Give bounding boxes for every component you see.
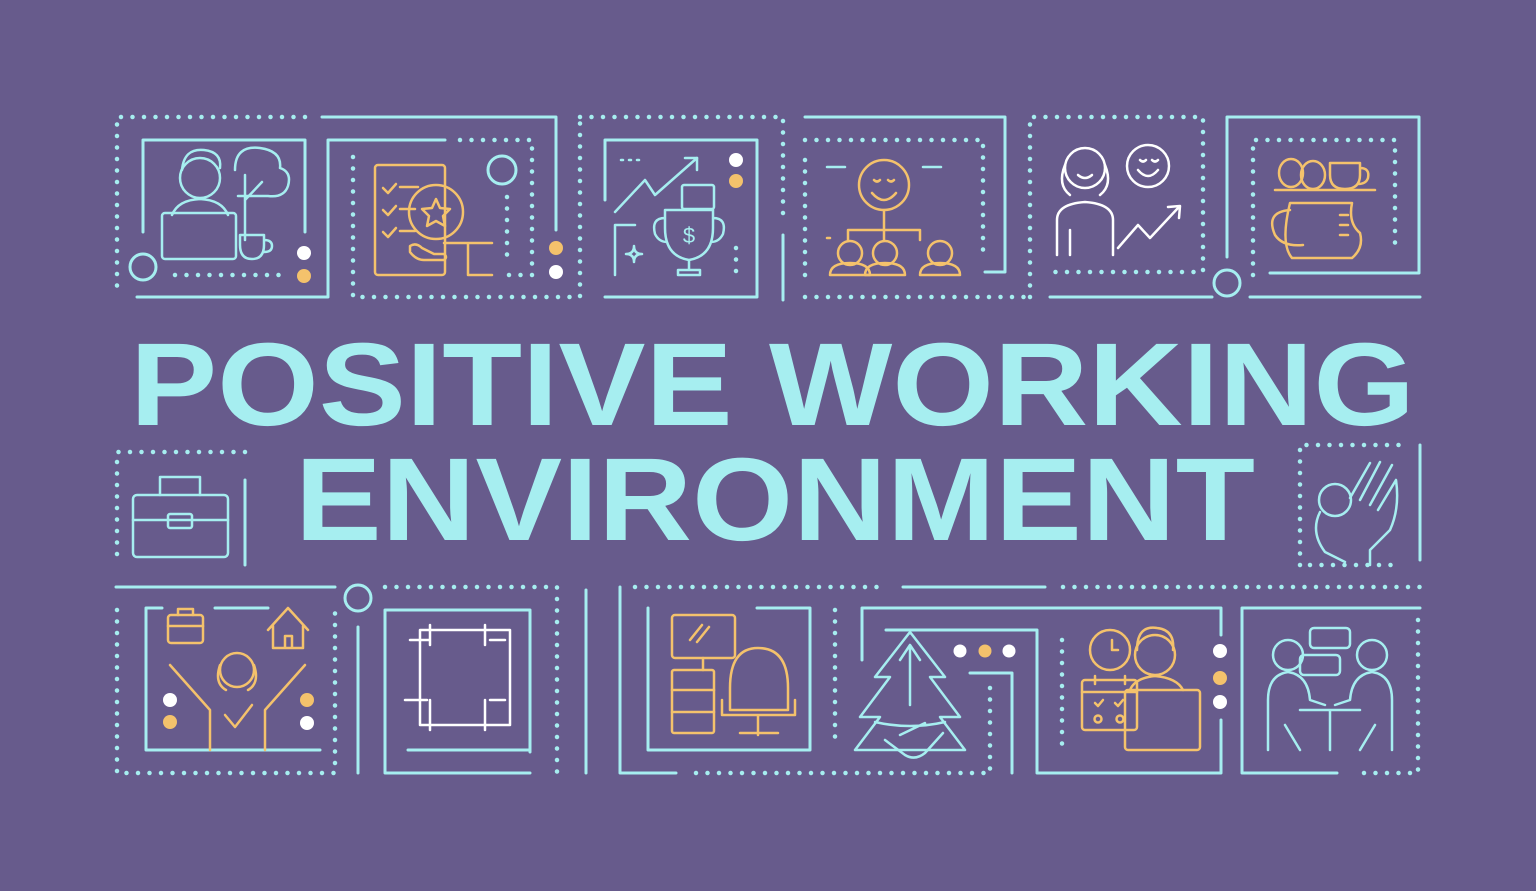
panel: middle side frames (117, 445, 1420, 565)
icon: clipboard with star (375, 165, 492, 275)
icon: OK hand gesture (1316, 462, 1397, 565)
icon: man with laptop and plant (162, 148, 289, 259)
icon: man with calendar and clock (1082, 628, 1200, 750)
panel: top row frames (117, 117, 1420, 300)
icon: briefcase (133, 477, 228, 557)
icon: tree with handshake (855, 632, 965, 758)
icon: woman celebrating work-life balance (168, 608, 308, 750)
panel: bottom row frames (116, 585, 1420, 773)
icon: desk, monitor and chair (672, 615, 795, 735)
icon: four hands teamwork (405, 625, 510, 730)
title: POSITIVE WORKING (130, 319, 1415, 451)
icon: growth chart with trophy (615, 158, 724, 275)
title: ENVIRONMENT (295, 434, 1255, 566)
icon: org chart with happy leader (827, 160, 960, 275)
title (130, 319, 1415, 566)
icon: woman with smiley and rising arrow (1057, 145, 1180, 255)
icon: cookies, cup and pitcher (1272, 159, 1375, 258)
icon: two people meeting at table (1268, 628, 1392, 750)
icon: growth chart with trophy: $ (683, 223, 695, 248)
